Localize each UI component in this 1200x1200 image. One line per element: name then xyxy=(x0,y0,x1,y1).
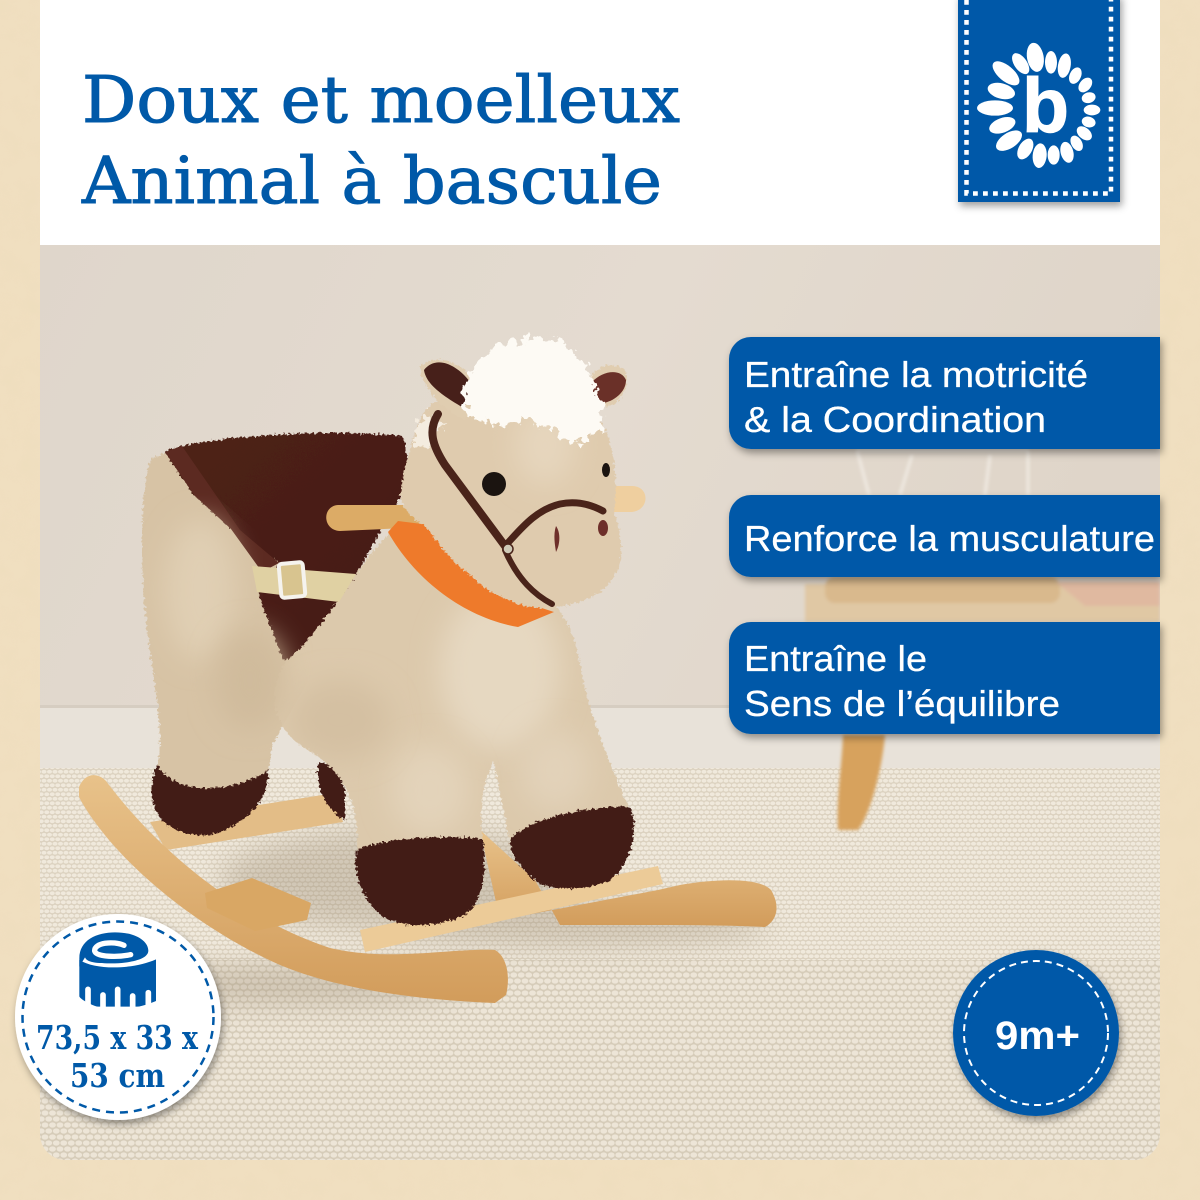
handle block xyxy=(205,878,311,931)
badge: dimensions xyxy=(15,914,221,1120)
title xyxy=(81,63,680,219)
left rocker xyxy=(79,775,508,1003)
callout text: motricité: Entraîne la motricité xyxy=(744,354,1088,395)
callout text: équilibre: Sens de l’équilibre xyxy=(744,683,1060,724)
callout text: musculature: Renforce la musculature xyxy=(744,518,1155,559)
inner ears xyxy=(424,362,468,406)
bridle xyxy=(432,414,603,604)
title: Animal à bascule xyxy=(81,144,662,219)
seat xyxy=(165,433,410,664)
front hooves xyxy=(356,807,634,925)
seat strap xyxy=(252,566,356,602)
mid slat and right rocker xyxy=(480,830,777,927)
callout: équilibre xyxy=(729,622,1160,734)
callout text: motricité: & la Coordination xyxy=(744,399,1046,440)
logo tag xyxy=(958,0,1120,202)
callout: musculature xyxy=(729,495,1160,577)
baseboard xyxy=(40,705,1160,771)
callout: motricité xyxy=(729,337,1160,449)
carpet xyxy=(40,768,1160,1160)
title: Doux et moelleux xyxy=(82,63,680,138)
head fur shading xyxy=(518,418,572,479)
strap buckle xyxy=(279,562,305,598)
badge: age: 9m+ xyxy=(995,1014,1080,1058)
badge: age xyxy=(953,950,1119,1116)
dimensions text xyxy=(36,1018,198,1095)
horse shadow on carpet xyxy=(130,830,770,1005)
seat trim xyxy=(165,446,279,572)
scarf xyxy=(388,521,554,627)
body xyxy=(275,530,630,850)
wall xyxy=(40,245,1160,715)
background side table xyxy=(805,450,1160,830)
head xyxy=(400,394,621,608)
icon: tape measure xyxy=(77,932,158,1015)
rear slat xyxy=(150,793,343,850)
body fur shading xyxy=(290,590,590,835)
handle bar xyxy=(326,505,428,531)
rocking horse xyxy=(79,337,777,1003)
nostrils xyxy=(598,520,608,536)
ears xyxy=(420,358,628,408)
callout text: motricité xyxy=(744,354,1088,440)
header panel xyxy=(40,0,1160,245)
dimensions text: 53 cm xyxy=(70,1056,165,1095)
rear fur shading xyxy=(165,520,285,730)
rear body xyxy=(140,452,286,790)
mane xyxy=(410,337,604,450)
callout text: équilibre: Entraîne le xyxy=(744,638,927,679)
rear hooves xyxy=(152,762,345,835)
buckle xyxy=(503,544,513,554)
logo tag: b xyxy=(1022,63,1069,149)
eyes xyxy=(482,472,506,496)
front slat xyxy=(360,866,663,952)
callout text: équilibre xyxy=(744,638,1060,724)
dimensions text: 73,5 x 33 x xyxy=(36,1018,198,1057)
photo: rocking horse in a room xyxy=(40,245,1160,1160)
